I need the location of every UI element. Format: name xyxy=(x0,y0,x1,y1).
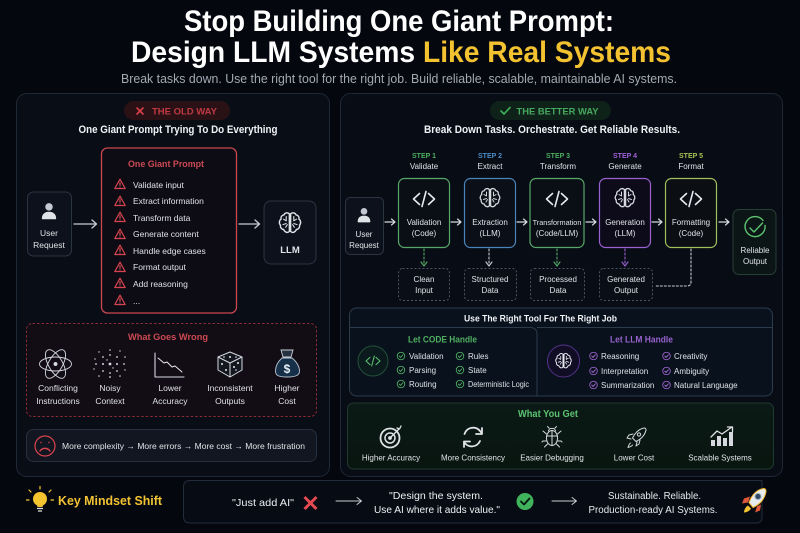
just add AI: "Just add AI" xyxy=(232,497,294,509)
step 4 xyxy=(600,153,650,248)
icon: noisy context xyxy=(93,349,126,378)
one giant prompt box: Transform data xyxy=(133,213,191,223)
output: structured data xyxy=(464,268,516,300)
badge: the old way: THE OLD WAY xyxy=(152,106,218,118)
label: more consistency: More Consistency xyxy=(441,454,505,462)
label: lower accuracy: Lower xyxy=(158,383,182,393)
reliable output box: Output xyxy=(743,257,768,266)
step 3: Transform xyxy=(540,162,576,171)
heading: better way: Break Down Tasks. Orchestrate. Get Reliable Results. xyxy=(424,124,680,136)
reliable output box: Reliable xyxy=(741,246,770,255)
subtitle: Break tasks down. Use the right tool for the right job. Build reliable, scalable, maintainable AI systems. xyxy=(121,72,677,86)
step 2: (LLM) xyxy=(480,229,501,238)
one giant prompt box: Add reasoning xyxy=(133,279,188,289)
step 1: Validate xyxy=(410,162,439,171)
what you get panel: What You Get xyxy=(518,409,579,420)
one giant prompt box: One Giant Prompt xyxy=(128,159,205,170)
step 1: (Code) xyxy=(412,229,437,238)
arrows between steps xyxy=(385,219,729,225)
icon: check circle xyxy=(745,217,765,237)
label: conflicting instructions: Conflicting xyxy=(38,383,78,393)
badge: the better way: THE BETTER WAY xyxy=(516,106,599,118)
step 1 xyxy=(398,153,450,248)
LLM box: LLM xyxy=(280,245,300,256)
label: higher cost xyxy=(274,383,300,406)
what goes wrong panel: What Goes Wrong xyxy=(128,332,208,343)
let llm handle xyxy=(548,334,738,390)
step 1: STEP 1 xyxy=(412,153,436,160)
sustainable result: Sustainable. Reliable. xyxy=(608,491,701,502)
arrow: request to prompt xyxy=(74,220,96,228)
let code handle: Routing xyxy=(409,380,437,389)
output: processed data: Data xyxy=(550,286,567,295)
icon: sad face xyxy=(35,436,55,456)
one giant prompt box xyxy=(102,148,236,313)
user request box xyxy=(28,192,72,256)
one giant prompt box: Extract information xyxy=(133,196,204,206)
right tool panel: Use The Right Tool For The Right Job xyxy=(464,314,617,324)
badge: the old way xyxy=(124,101,230,120)
dashed arrows to outputs xyxy=(421,249,691,286)
design the system quote: Use AI where it adds value." xyxy=(374,504,500,516)
one giant prompt box: Handle edge cases xyxy=(133,246,206,256)
step 3: (Code/LLM) xyxy=(536,229,578,238)
output: processed data: Processed xyxy=(539,275,577,284)
output: clean input: Clean xyxy=(414,275,434,284)
let llm handle: Creativity xyxy=(674,352,707,361)
step 5: STEP 5 xyxy=(679,153,703,160)
let code handle: Validation xyxy=(409,352,444,361)
step 2: STEP 2 xyxy=(478,153,502,160)
step 5: (Code) xyxy=(679,229,704,238)
step 2 xyxy=(464,153,516,248)
icon: target xyxy=(380,426,401,448)
what goes wrong panel xyxy=(26,324,316,416)
icon: light bulb xyxy=(26,486,54,511)
user request box: Request xyxy=(33,240,65,250)
label: lower accuracy: Accuracy xyxy=(153,396,188,406)
icon: conflicting instructions xyxy=(40,347,72,381)
let llm handle: Interpretation xyxy=(601,367,648,376)
heading: old way: One Giant Prompt Trying To Do Everything xyxy=(78,124,278,136)
step 2: Extract xyxy=(478,162,503,171)
let llm handle: Let LLM Handle xyxy=(610,334,673,346)
title xyxy=(131,5,671,69)
reliable output box xyxy=(733,210,776,274)
panel: the better way xyxy=(340,94,782,476)
consequences bar xyxy=(26,430,316,462)
icon: rocket xyxy=(627,428,646,448)
icon: inconsistent outputs xyxy=(218,352,242,377)
panel: the old way xyxy=(16,94,782,523)
title: Stop Building One Giant Prompt: xyxy=(184,5,614,38)
output: structured data: Structured xyxy=(472,275,508,284)
icon: higher cost xyxy=(276,350,300,377)
let code handle: State xyxy=(468,366,487,375)
consequences bar: More complexity → More errors → More cost → More frustration xyxy=(62,441,305,451)
let code handle: Deterministic Logic xyxy=(468,380,529,389)
label: scalable systems: Scalable Systems xyxy=(688,454,752,462)
key mindset shift heading: Key Mindset Shift xyxy=(58,493,163,508)
what you get panel xyxy=(348,403,774,469)
let code handle: Let CODE Handle xyxy=(408,334,477,346)
step 1: Validation xyxy=(407,218,441,227)
label: higher cost: Higher xyxy=(274,383,300,393)
output: generated output xyxy=(600,268,652,300)
output: clean input xyxy=(398,268,450,300)
badge: the better way xyxy=(490,101,611,120)
icon: growth chart xyxy=(711,427,733,446)
let llm handle: Reasoning xyxy=(601,352,639,361)
let code handle: Parsing xyxy=(409,366,436,375)
let llm handle: Ambiguity xyxy=(674,367,709,376)
user request box: User xyxy=(40,228,58,238)
step 4: (LLM) xyxy=(615,229,636,238)
step 3: STEP 3 xyxy=(546,153,570,160)
label: noisy context: Context xyxy=(95,396,125,406)
one giant prompt box: Generate content xyxy=(133,229,199,239)
label: inconsistent outputs xyxy=(207,383,253,406)
user request: Request xyxy=(349,241,380,250)
icon: green check xyxy=(516,493,534,510)
step 5: Formatting xyxy=(672,218,710,227)
step 4: Generate xyxy=(608,162,642,171)
label: noisy context: Noisy xyxy=(99,383,121,393)
step 3 xyxy=(530,153,584,248)
step 4: Generation xyxy=(605,218,645,227)
label: conflicting instructions: Instructions xyxy=(36,396,80,406)
output: structured data: Data xyxy=(482,286,499,295)
step 2: Extraction xyxy=(472,218,508,227)
sustainable result xyxy=(588,491,718,516)
step 5: Format xyxy=(678,162,704,171)
one giant prompt box: Validate input xyxy=(133,180,185,190)
label: lower accuracy xyxy=(153,383,188,406)
arrow xyxy=(552,498,576,504)
label: higher cost: Cost xyxy=(278,396,296,406)
let code handle xyxy=(358,334,529,389)
one giant prompt box: Format output xyxy=(133,262,187,272)
icon: refresh arrows xyxy=(464,428,482,447)
step 3: Transformation xyxy=(533,218,581,227)
output: generated output: Generated xyxy=(607,275,645,284)
icon: lower accuracy xyxy=(155,353,184,377)
user request xyxy=(346,198,384,254)
design the system quote xyxy=(374,490,500,516)
label: easier debugging: Easier Debugging xyxy=(520,454,584,462)
step 5 xyxy=(666,153,716,248)
sustainable result: Production-ready AI Systems. xyxy=(588,505,718,516)
step 4: STEP 4 xyxy=(613,153,637,160)
icon: rocket xyxy=(742,488,766,512)
design the system quote: "Design the system. xyxy=(389,490,483,502)
output: generated output: Output xyxy=(614,286,639,295)
let llm handle: Summarization xyxy=(601,381,654,390)
output: clean input: Input xyxy=(415,286,434,295)
arrow xyxy=(336,498,362,504)
label: noisy context xyxy=(95,383,125,406)
mindset comparison bar xyxy=(184,480,766,523)
let llm handle: Natural Language xyxy=(674,381,738,390)
icon: higher cost: $ xyxy=(284,362,291,376)
arrow: prompt to LLM xyxy=(239,220,260,228)
label: lower cost: Lower Cost xyxy=(614,454,655,462)
right tool panel xyxy=(350,308,772,396)
one giant prompt box: ... xyxy=(133,296,140,306)
user request: User xyxy=(356,230,373,239)
label: inconsistent outputs: Inconsistent xyxy=(207,383,253,393)
label: conflicting instructions xyxy=(36,383,80,406)
output: processed data xyxy=(530,268,584,300)
label: higher accuracy: Higher Accuracy xyxy=(362,454,420,462)
let code handle: Rules xyxy=(468,352,488,361)
icon: bug xyxy=(542,426,562,447)
LLM box xyxy=(264,201,316,264)
label: inconsistent outputs: Outputs xyxy=(215,396,245,406)
title: Design LLM Systems Like Real Systems xyxy=(131,36,671,69)
